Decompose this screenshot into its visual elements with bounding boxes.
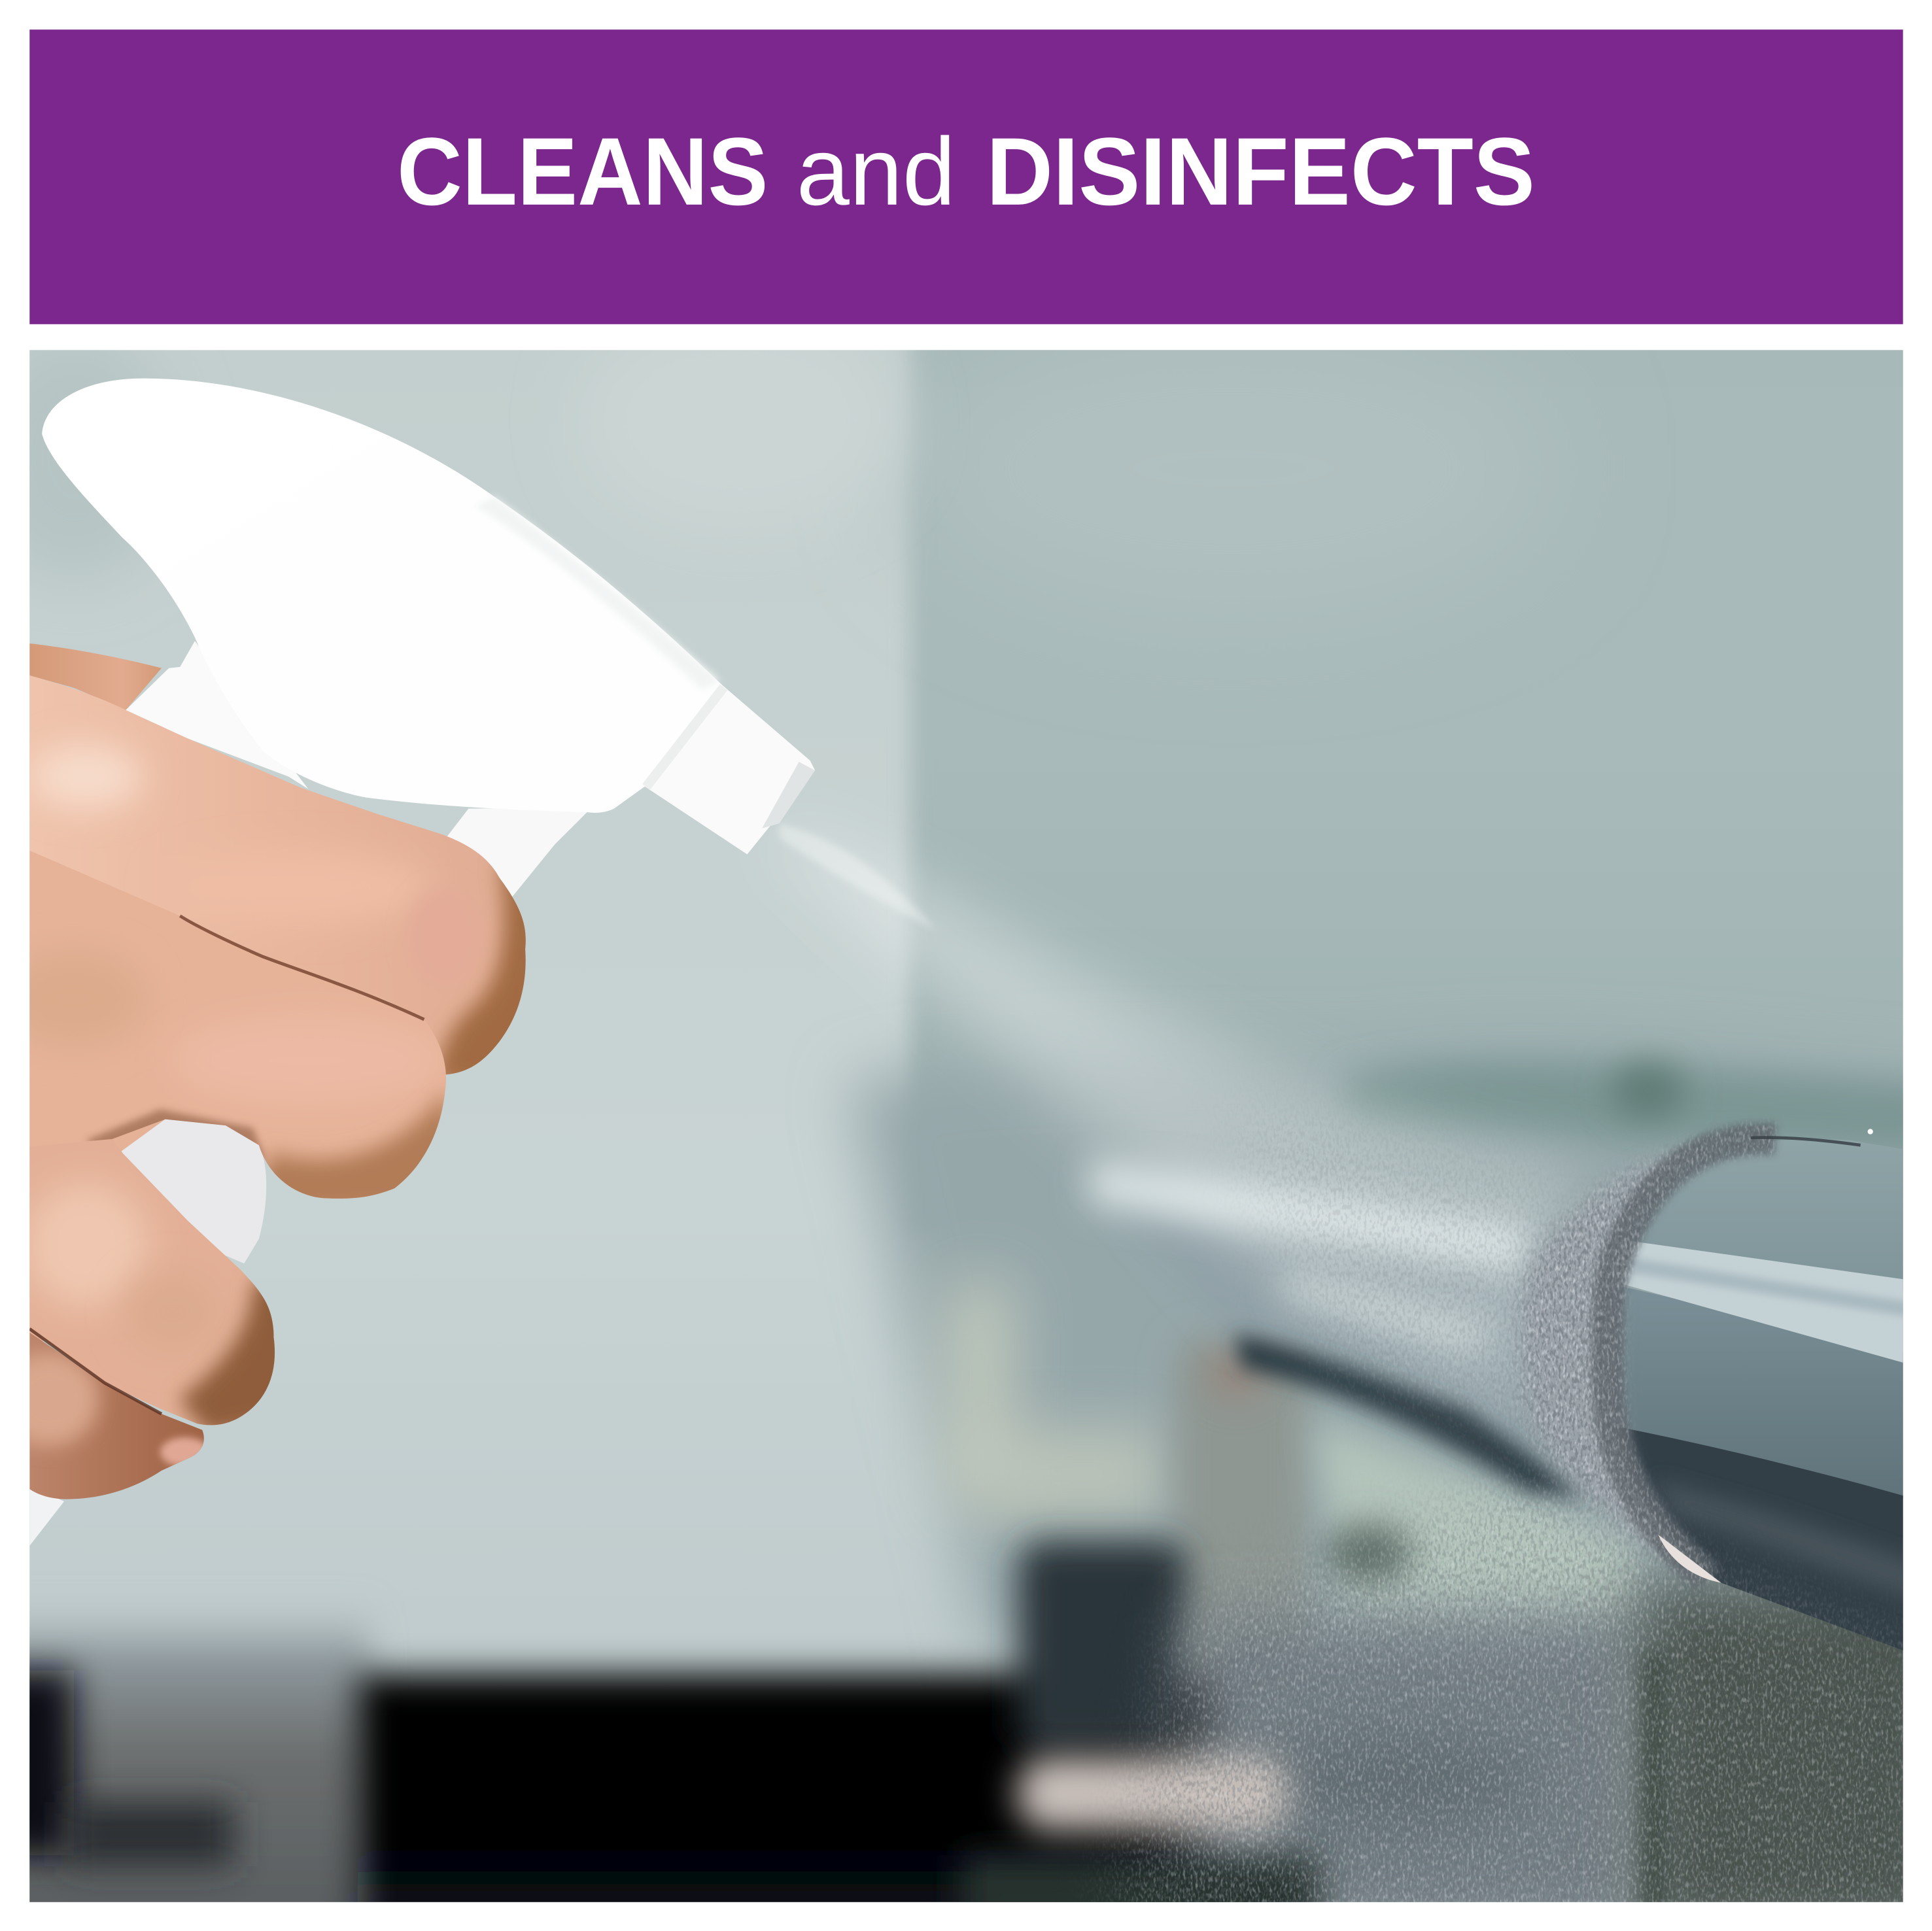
- spray mist: [777, 823, 1932, 1911]
- lower bottle grip: [111, 1118, 266, 1263]
- finger creases: [180, 916, 424, 1019]
- photo: hand spraying cleaner on a surface: [29, 350, 1903, 1902]
- bottle neck below hand: [29, 1486, 64, 1546]
- ring finger: [0, 1121, 296, 1443]
- title: cleans and disinfects: DISINFECTS: [986, 118, 1535, 226]
- middle finger: [0, 838, 493, 1214]
- title: cleans and disinfects: CLEANS: [397, 118, 768, 226]
- mist ring on the tube: dark inner speckle: [1479, 1110, 1850, 1603]
- hand fingers: [0, 641, 555, 1516]
- collar under trigger head: [126, 641, 308, 789]
- title banner: [29, 29, 1903, 324]
- little finger: [0, 1319, 222, 1516]
- index finger: [0, 641, 555, 1110]
- dark foreground: [0, 1541, 1932, 1931]
- title: cleans and disinfects: [397, 118, 1535, 226]
- blurred counter and background objects: [851, 1050, 1932, 1683]
- mist ring on the tube: outer pale band: [1479, 1110, 1850, 1603]
- spray trigger: [444, 808, 592, 904]
- thumb: [29, 643, 162, 710]
- palm: [29, 675, 247, 1356]
- blurred background wall: [29, 350, 1903, 1902]
- title: cleans and disinfects: and: [797, 118, 956, 226]
- spray bottle head: [42, 379, 815, 854]
- shiny metal tube: [1090, 1139, 1923, 1658]
